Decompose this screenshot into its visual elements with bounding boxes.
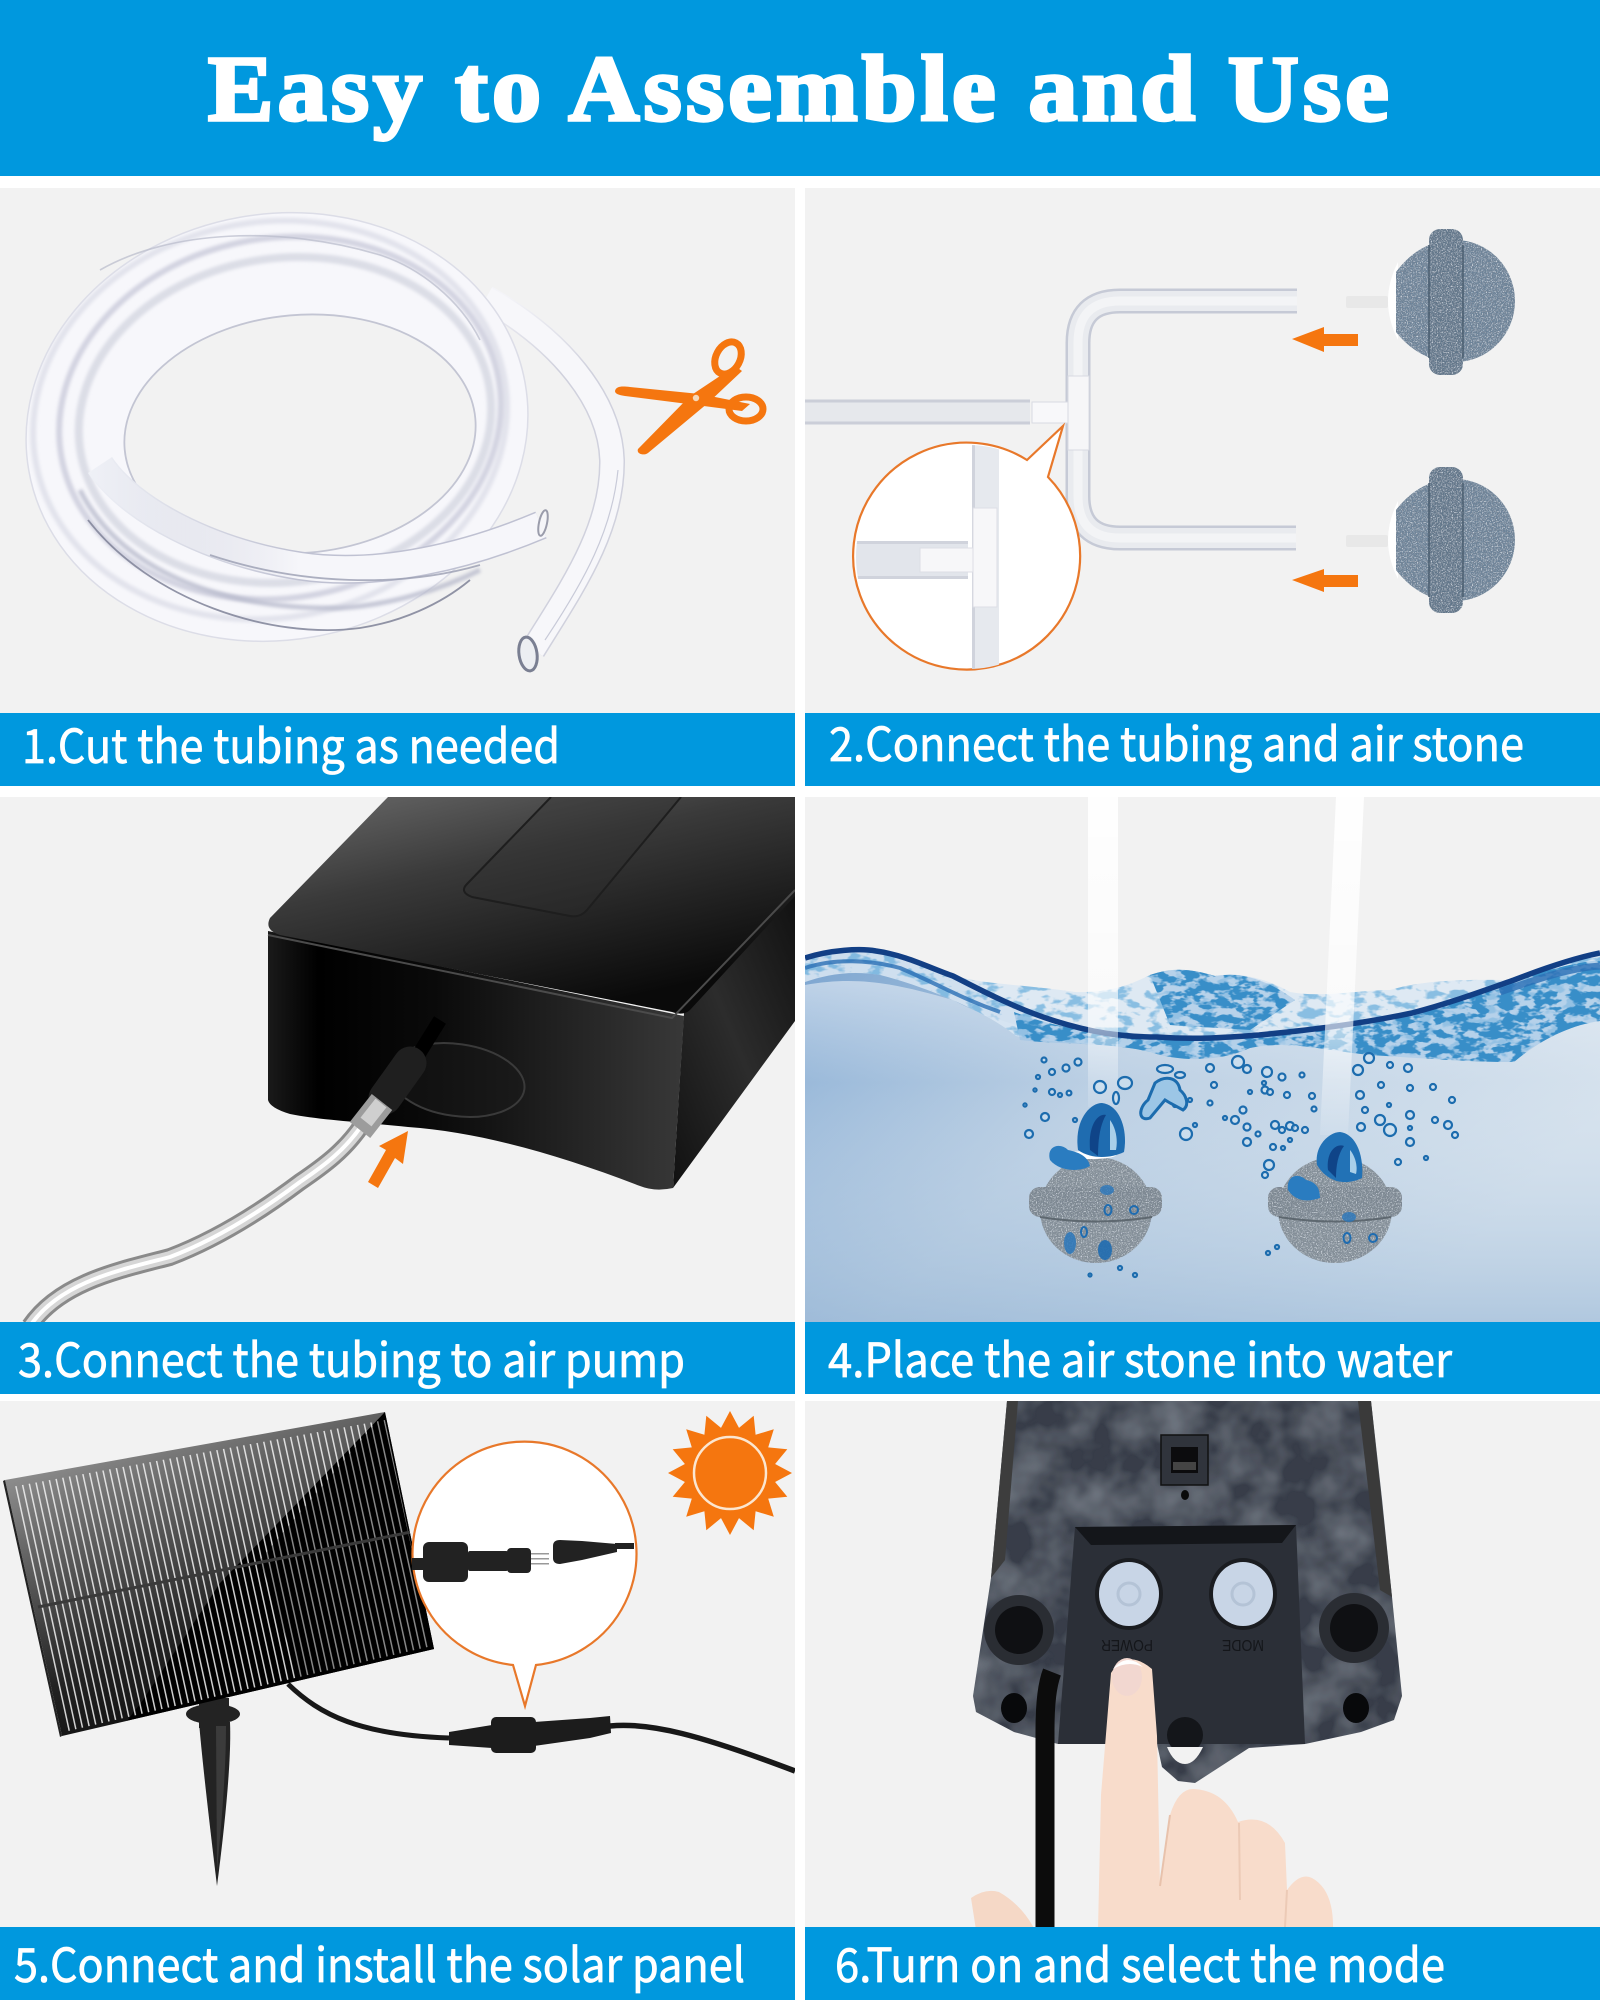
control recess [1058,1525,1305,1744]
tube end near [517,636,539,672]
ground stake [186,1698,240,1886]
pump top recess [464,797,681,916]
air stone: upper [1346,229,1515,375]
air stone: right [1268,1132,1402,1263]
bubble burst on left stone [1077,1103,1125,1157]
POWER label: POWER [1101,1636,1153,1653]
zoom callout [412,1442,637,1706]
rubber foot left [984,1595,1054,1665]
clear Y tubing [805,301,1297,538]
coiled clear tubing [0,173,618,681]
hand pressing button [971,1658,1333,1930]
arrow: lower [1292,569,1358,592]
panel 3: connect tubing to air pump [0,797,795,1394]
dense texture below waterline [1000,960,1600,1070]
caption bar 5 [0,1927,795,2000]
cable [288,1684,795,1771]
MODE label: MODE [1222,1636,1264,1653]
large bubble cluster [1141,1078,1187,1119]
air stone: lower [1346,467,1515,613]
arrow: upper [1292,327,1358,352]
power cable [1045,1672,1052,1927]
waterline [805,950,1600,1038]
solar panel [3,1412,440,1737]
caption bar 1 [0,713,795,786]
caption 3: 3.Connect the tubing to air pump [18,1322,685,1391]
caption bar 6 [805,1927,1600,2000]
panel 1: cut the tubing [0,173,795,786]
caption bar 4 [805,1322,1600,1394]
caption 4: 4.Place the air stone into water [828,1322,1453,1391]
tube end far [536,509,550,537]
POWER button [1095,1558,1163,1630]
caption bar 2 [805,713,1600,786]
coil loops body [0,173,562,681]
caption 5: 5.Connect and install the solar panel [14,1927,745,1996]
air line tubes [1088,797,1118,1107]
rising bubbles [1023,1053,1458,1277]
icon: sun [668,1411,792,1535]
inline waterproof connector [449,1716,611,1753]
air pump [30,797,795,1326]
loose tube tail [486,298,618,650]
icon: scissors [615,337,763,454]
arrow: to pump port [368,1131,408,1188]
title: Easy to Assemble and Use [208,38,1393,141]
water body [805,797,1600,1322]
magnifier callout [850,426,1080,675]
panel 6: turn on and select mode [805,1401,1600,2000]
header banner [0,0,1600,176]
tubing [30,1020,440,1326]
tube running to cut end [100,465,541,580]
rubber foot right [1319,1593,1389,1663]
air stone: left [1029,1103,1162,1263]
wave splash texture [805,952,1600,1060]
caption 1: 1.Cut the tubing as needed [22,708,560,777]
caption bar 3 [0,1322,795,1394]
pump port oval [404,1042,526,1118]
panel 4: place the air stone into water [805,797,1600,1394]
pump underside [973,1401,1402,1783]
caption 6: 6.Turn on and select the mode [835,1927,1445,1996]
panel 2: connect tubing and air stone [805,188,1600,786]
panel 5: connect and install solar panel [0,1401,795,2000]
MODE button [1209,1558,1277,1630]
separated connector detail [412,1540,634,1582]
caption 2: 2.Connect the tubing and air stone [829,706,1524,775]
mode switch slot [1161,1435,1208,1500]
bubble burst on right stone [1317,1132,1362,1182]
